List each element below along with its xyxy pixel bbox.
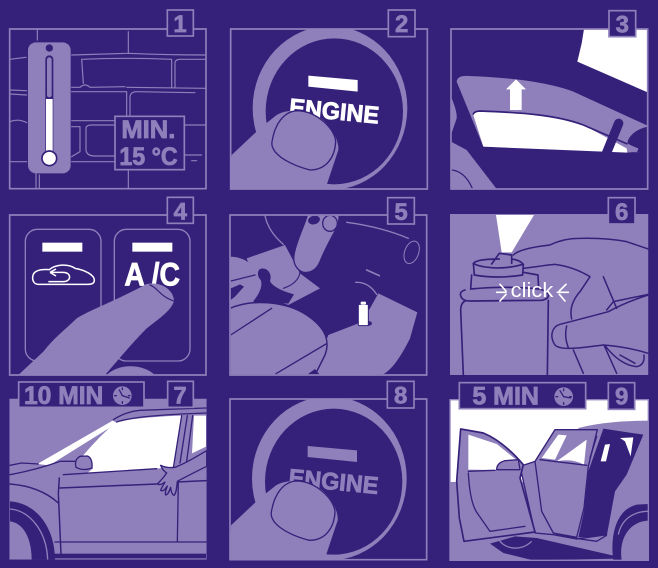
panel frame bbox=[450, 400, 648, 560]
panel 2: engine start bbox=[230, 10, 427, 190]
car window scene bbox=[451, 29, 648, 189]
icon: clock bbox=[554, 387, 573, 406]
panel 5: place can in footwell bbox=[230, 198, 427, 375]
step badge 6: 6 bbox=[615, 199, 628, 226]
step badge 1: 1 bbox=[173, 11, 187, 38]
panel 3: close windows bbox=[451, 11, 648, 189]
step badge 7: 7 bbox=[173, 382, 187, 409]
car with open doors bbox=[450, 400, 648, 560]
engine button: ENGINE bbox=[287, 464, 380, 500]
panel 9: five minute airing bbox=[450, 383, 648, 560]
dashboard buttons: A /C bbox=[124, 257, 180, 293]
engine button: ENGINE bbox=[288, 94, 380, 130]
step badge 9: 9 bbox=[615, 384, 628, 411]
step badge 8 bbox=[387, 381, 414, 410]
open front door bbox=[457, 429, 535, 541]
panel frame bbox=[10, 29, 206, 189]
car side view bbox=[9, 399, 207, 560]
panel frame bbox=[231, 29, 427, 189]
step badge 3 bbox=[609, 11, 636, 39]
panel 1: minimum temperature bbox=[10, 10, 206, 189]
arm and hand bbox=[157, 451, 207, 495]
panel 4: air conditioning button bbox=[10, 197, 206, 375]
click label: click bbox=[511, 279, 554, 302]
dashboard buttons bbox=[18, 229, 190, 375]
icon: spray can bbox=[358, 302, 372, 326]
panel 8: engine stop bbox=[229, 381, 427, 560]
step badge 3: 3 bbox=[616, 12, 629, 39]
callout: minimum temperature bbox=[115, 116, 184, 171]
step badge 2 bbox=[388, 10, 415, 38]
panel 6: activate spray can bbox=[450, 198, 648, 375]
panel frame bbox=[451, 29, 648, 189]
panel frame bbox=[230, 399, 427, 560]
step badge 6 bbox=[608, 198, 635, 226]
engine button bbox=[229, 396, 407, 560]
step badge 5 bbox=[388, 198, 414, 226]
brick wall bbox=[10, 30, 206, 189]
callout: minimum temperature: 15 °C bbox=[119, 143, 178, 171]
step badge 5: 5 bbox=[394, 199, 408, 226]
open rear door bbox=[535, 430, 597, 537]
can and hand scene bbox=[450, 214, 648, 375]
duration label: 10 min: 10 MIN bbox=[24, 383, 103, 410]
step badge 4: 4 bbox=[174, 198, 188, 225]
step badge 1 bbox=[167, 10, 193, 38]
duration label: 10 min bbox=[19, 382, 144, 410]
panel 7: ten minute wait bbox=[9, 381, 207, 560]
step badge 2: 2 bbox=[395, 11, 408, 38]
icon: thermometer bbox=[28, 42, 71, 173]
step badge 7 bbox=[168, 381, 193, 409]
icon: up arrow bbox=[506, 79, 526, 110]
step badge 8: 8 bbox=[394, 383, 407, 410]
panel frame bbox=[230, 215, 427, 375]
click label bbox=[496, 282, 570, 302]
duration label: 5 min bbox=[459, 383, 586, 411]
car interior scene bbox=[230, 214, 422, 375]
panel frame bbox=[10, 215, 206, 375]
duration label: 5 min: 5 MIN bbox=[472, 384, 539, 411]
step badge 9 bbox=[608, 383, 635, 411]
step badge 4 bbox=[167, 197, 193, 225]
icon: clock bbox=[113, 386, 132, 405]
engine button bbox=[230, 26, 407, 190]
callout: minimum temperature: MIN. bbox=[121, 116, 175, 144]
